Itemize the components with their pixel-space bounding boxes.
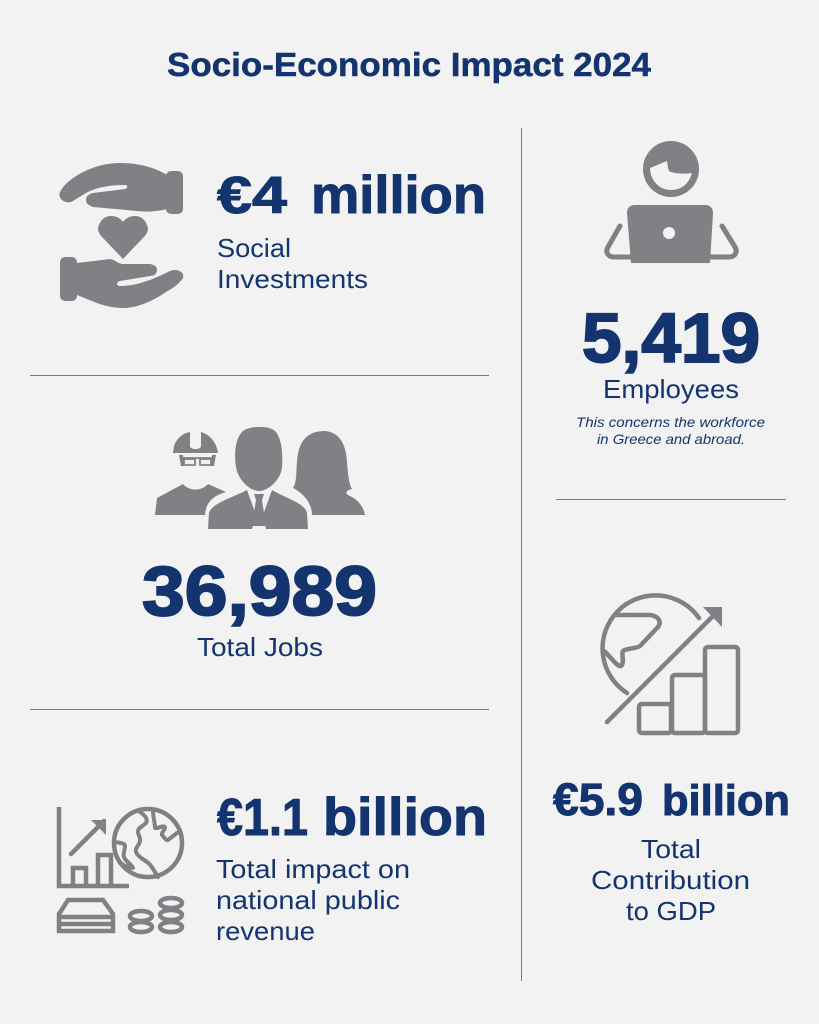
label: social investments: Investments <box>217 264 368 294</box>
label: public revenue: revenue <box>216 916 315 946</box>
label: public revenue: Total impact on <box>216 854 410 884</box>
icon: globe with growth bars <box>603 595 738 733</box>
icon: three people <box>155 427 365 529</box>
label: social investments: Social <box>217 233 291 263</box>
note: workforce: in Greece and abroad. <box>597 431 745 447</box>
stat: 4 million: million <box>311 166 486 225</box>
label: employees: Employees <box>603 374 739 404</box>
title: Socio-Economic Impact 2024 <box>167 46 652 83</box>
label: social investments <box>217 233 368 294</box>
label: total contribution to GDP: to GDP <box>626 896 716 926</box>
note: workforce <box>576 414 765 447</box>
icon: person at laptop <box>607 141 736 263</box>
icon: chart globe money coins <box>59 807 182 932</box>
label: public revenue: national public <box>216 885 400 915</box>
stat: 1.1 billion: billion <box>323 788 487 847</box>
stat: 5.9 billion: €5.9 <box>553 774 643 825</box>
label: total jobs: Total Jobs <box>197 632 323 662</box>
panel: contribution to GDP <box>553 595 790 926</box>
label: total contribution to GDP <box>591 834 750 926</box>
panel: employees <box>576 141 765 447</box>
label: public revenue <box>216 854 410 946</box>
stat: 4 million <box>217 166 486 225</box>
stat: 5.9 billion: billion <box>662 777 790 825</box>
stat: 5,419: 5,419 <box>582 299 760 377</box>
panel: total jobs <box>142 427 377 662</box>
panel: social investments <box>59 163 486 308</box>
stat: 1.1 billion: €1.1 <box>217 789 308 847</box>
label: total contribution to GDP: Total <box>641 834 701 864</box>
icon: hands and heart <box>59 163 183 308</box>
stat: 1.1 billion <box>217 788 487 847</box>
stat: 36,989: 36,989 <box>142 552 377 630</box>
panel: public revenue <box>59 788 487 946</box>
stat: 5.9 billion <box>553 774 790 825</box>
stat: 4 million: €4 <box>217 167 287 225</box>
label: total contribution to GDP: Contribution <box>591 865 750 895</box>
note: workforce: This concerns the workforce <box>576 414 765 430</box>
